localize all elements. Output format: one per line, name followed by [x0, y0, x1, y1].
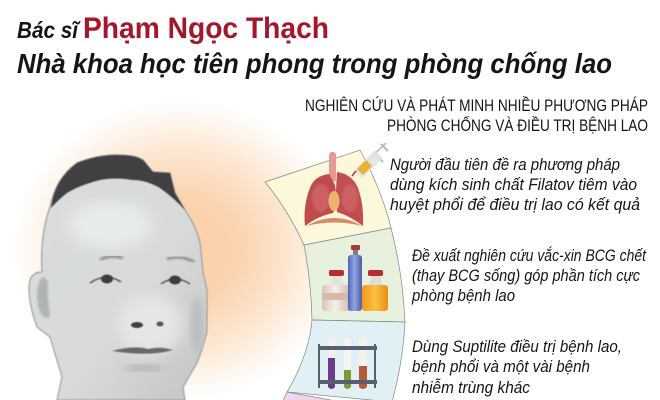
icon: syringe [352, 143, 388, 178]
text block 3: Dùng Suptilite điều trị bệnh lao, [412, 338, 622, 356]
text block 1: dùng kích sinh chất Filatov tiêm vào [390, 176, 637, 194]
curved band: yellow panel [265, 150, 391, 245]
background glow [0, 95, 350, 400]
icon: lungs [305, 152, 363, 226]
title line 1: Phạm Ngọc Thạch [83, 12, 329, 45]
blue bottle [348, 245, 362, 311]
icon: test tubes [318, 338, 377, 390]
hair [51, 155, 185, 210]
portrait [29, 155, 207, 400]
text block 3 [412, 338, 622, 397]
white bottle [322, 270, 352, 311]
text block 1 [390, 156, 640, 214]
curved band: purple panel [283, 392, 336, 400]
curved band: green panel [304, 228, 405, 322]
text block 3: nhiễm trùng khác [412, 378, 531, 397]
text block 2 [411, 246, 647, 305]
text block 3: bệnh phổi và một vài bệnh [412, 358, 590, 376]
text block 2: phòng bệnh lao [411, 287, 515, 305]
subheading [305, 96, 648, 135]
icon: gas bottles [322, 245, 388, 311]
orange bottle [362, 270, 388, 311]
text block 1: huyệt phổi để điều trị lao có kết quả [390, 196, 640, 214]
title line 1: Bác sĩ [17, 17, 81, 43]
text block 1: Người đầu tiên đề ra phương pháp [390, 156, 620, 174]
curved band: blue panel [287, 320, 405, 400]
title line 2: Nhà khoa học tiên phong trong phòng chống lao [17, 48, 612, 79]
